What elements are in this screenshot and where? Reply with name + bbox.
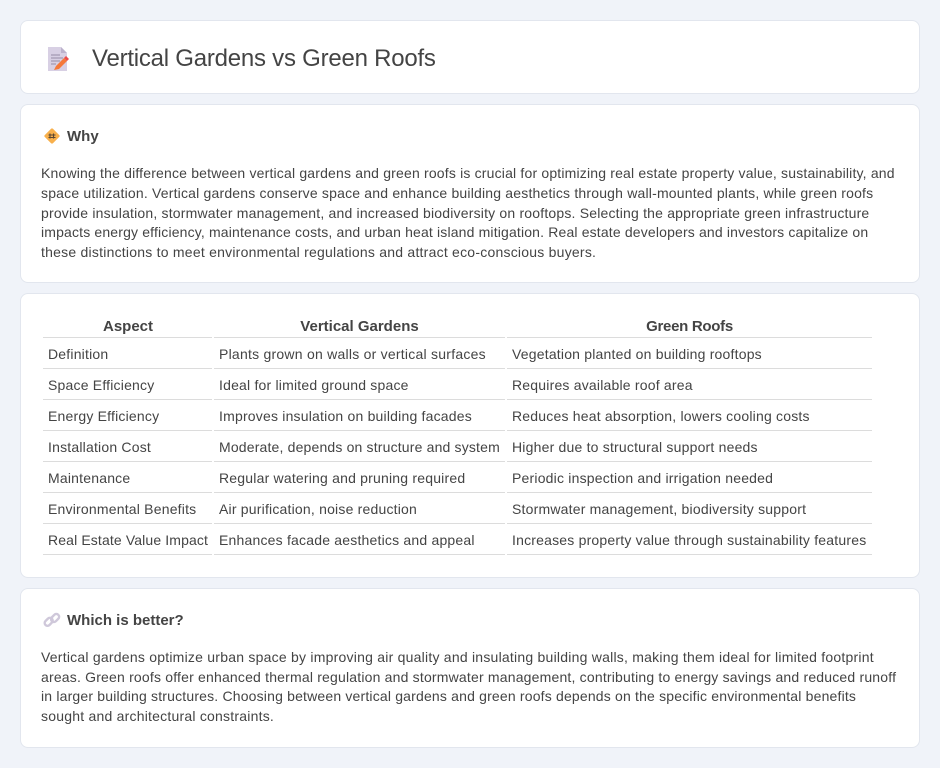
table row: real estate value impact (48, 532, 866, 548)
text block: verdict: areas. Green roofs offer enhanced thermal regulation and stormwater management, contributing to energy savings and reduced runoff (41, 669, 896, 685)
table row: space efficiency (48, 377, 693, 393)
table row: energy efficiency: Improves insulation on building facades (219, 408, 472, 424)
icon: document with pencil (48, 47, 69, 71)
table row: installation cost (48, 439, 758, 455)
table row: maintenance (48, 470, 773, 486)
table row: maintenance: Periodic inspection and irrigation needed (512, 470, 773, 486)
table row: maintenance: Regular watering and pruning required (219, 470, 465, 486)
table row: maintenance: Maintenance (48, 470, 130, 486)
table header row: Vertical Gardens (300, 318, 419, 335)
panel: header (20, 20, 920, 94)
text block: verdict (41, 649, 896, 724)
text block: why explanation: these distinctions to meet environmental regulations and attract eco-conscious buyers. (41, 244, 596, 260)
table row: definition: Definition (48, 346, 108, 362)
text block: why explanation: space utilization. Vertical gardens conserve space and enhance building aesthetics through wall-mounted plants, while green roofs (41, 185, 873, 201)
heading: why: Why (67, 128, 99, 145)
icon: warning diamond (44, 128, 60, 144)
table row: installation cost: Higher due to structural support needs (512, 439, 758, 455)
table row: definition: Vegetation planted on building rooftops (512, 346, 762, 362)
text block: why explanation: impacts energy efficiency, maintenance costs, and urban heat island mitigation. Real estate developers and investors capitalize on (41, 224, 868, 240)
table row: energy efficiency: Energy Efficiency (48, 408, 159, 424)
table row: definition (48, 346, 762, 362)
heading: which is better: Which is better? (67, 612, 184, 629)
table row: installation cost: Moderate, depends on structure and system (219, 439, 500, 455)
table header row (103, 318, 733, 335)
table row: environmental benefits: Air purification, noise reduction (219, 501, 417, 517)
icon: chain link (44, 612, 60, 627)
table row: energy efficiency (48, 408, 810, 424)
title: Vertical Gardens vs Green Roofs (92, 45, 436, 72)
text block: verdict: Vertical gardens optimize urban space by improving air quality and insulating building walls, making them ideal for limited footprint (41, 649, 874, 665)
panel: why (20, 104, 920, 283)
table row: real estate value impact: Increases property value through sustainability features (512, 532, 866, 548)
text block: why explanation: Knowing the difference between vertical gardens and green roofs is crucial for optimizing real estate property value, sustainability, and (41, 165, 895, 181)
table row: space efficiency: Requires available roof area (512, 377, 693, 393)
table row: environmental benefits: Stormwater management, biodiversity support (512, 501, 806, 517)
table row: installation cost: Installation Cost (48, 439, 151, 455)
text block: verdict: in larger building structures. Choosing between vertical gardens and green roofs depends on the specific environmental benefits (41, 688, 856, 704)
panel: which is better (20, 588, 920, 748)
table header row: Aspect (103, 318, 153, 335)
table row: real estate value impact: Real Estate Value Impact (48, 532, 208, 548)
table row: space efficiency: Ideal for limited ground space (219, 377, 409, 393)
table row: real estate value impact: Enhances facade aesthetics and appeal (219, 532, 475, 548)
panel: comparison table (20, 293, 920, 578)
table row: environmental benefits (48, 501, 806, 517)
table row: environmental benefits: Environmental Benefits (48, 501, 196, 517)
table header row: Green Roofs (646, 318, 733, 335)
table row: energy efficiency: Reduces heat absorption, lowers cooling costs (512, 408, 810, 424)
text block: why explanation (41, 165, 895, 260)
text block: verdict: sought and architectural constraints. (41, 708, 274, 724)
text block: why explanation: provide insulation, stormwater management, and increased biodiversity on rooftops. Selecting the appropriate green infrastructure (41, 205, 869, 221)
table row: definition: Plants grown on walls or vertical surfaces (219, 346, 486, 362)
table row: space efficiency: Space Efficiency (48, 377, 154, 393)
